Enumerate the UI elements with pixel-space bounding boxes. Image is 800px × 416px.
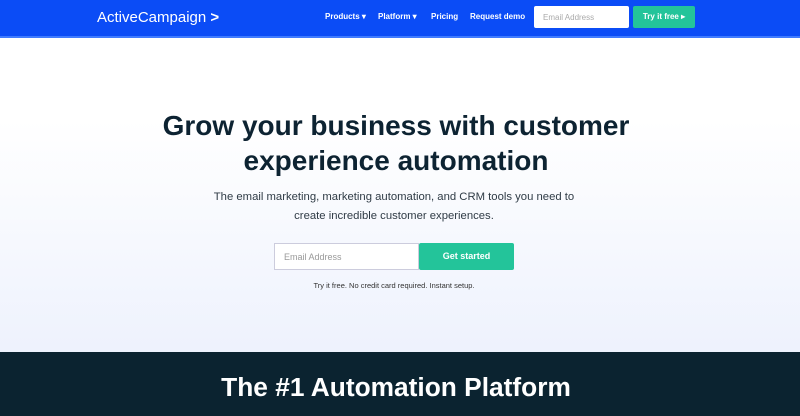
disclaimer: Try it free. No credit card required. Instant setup. [313, 281, 475, 290]
section title: The #1 Automation Platform [221, 372, 571, 402]
nav links: Platform ▾ [378, 12, 417, 21]
nav links: Products ▾ [325, 12, 366, 21]
subheading: The email marketing, marketing automation, and CRM tools you need to [214, 191, 574, 203]
logo: ActiveCampaign > [97, 9, 219, 26]
subheading: create incredible customer experiences. [294, 210, 494, 222]
headline: Grow your business with customer [163, 110, 629, 141]
email input [274, 243, 419, 270]
nav links [325, 12, 525, 21]
headline: experience automation [244, 145, 548, 176]
signup form [274, 243, 514, 270]
nav links: Pricing [431, 12, 458, 21]
email input: Email Address [284, 252, 342, 262]
nav button [633, 6, 695, 28]
subheading [214, 191, 574, 222]
get started button [419, 243, 514, 270]
nav email input [534, 6, 629, 28]
nav email input: Email Address [543, 13, 594, 22]
dark section [0, 352, 800, 416]
headline [163, 110, 629, 176]
get started button: Get started [443, 251, 490, 261]
nav button: Try it free ▸ [643, 12, 685, 21]
nav links: Request demo [470, 12, 525, 21]
nav bar [0, 0, 800, 38]
